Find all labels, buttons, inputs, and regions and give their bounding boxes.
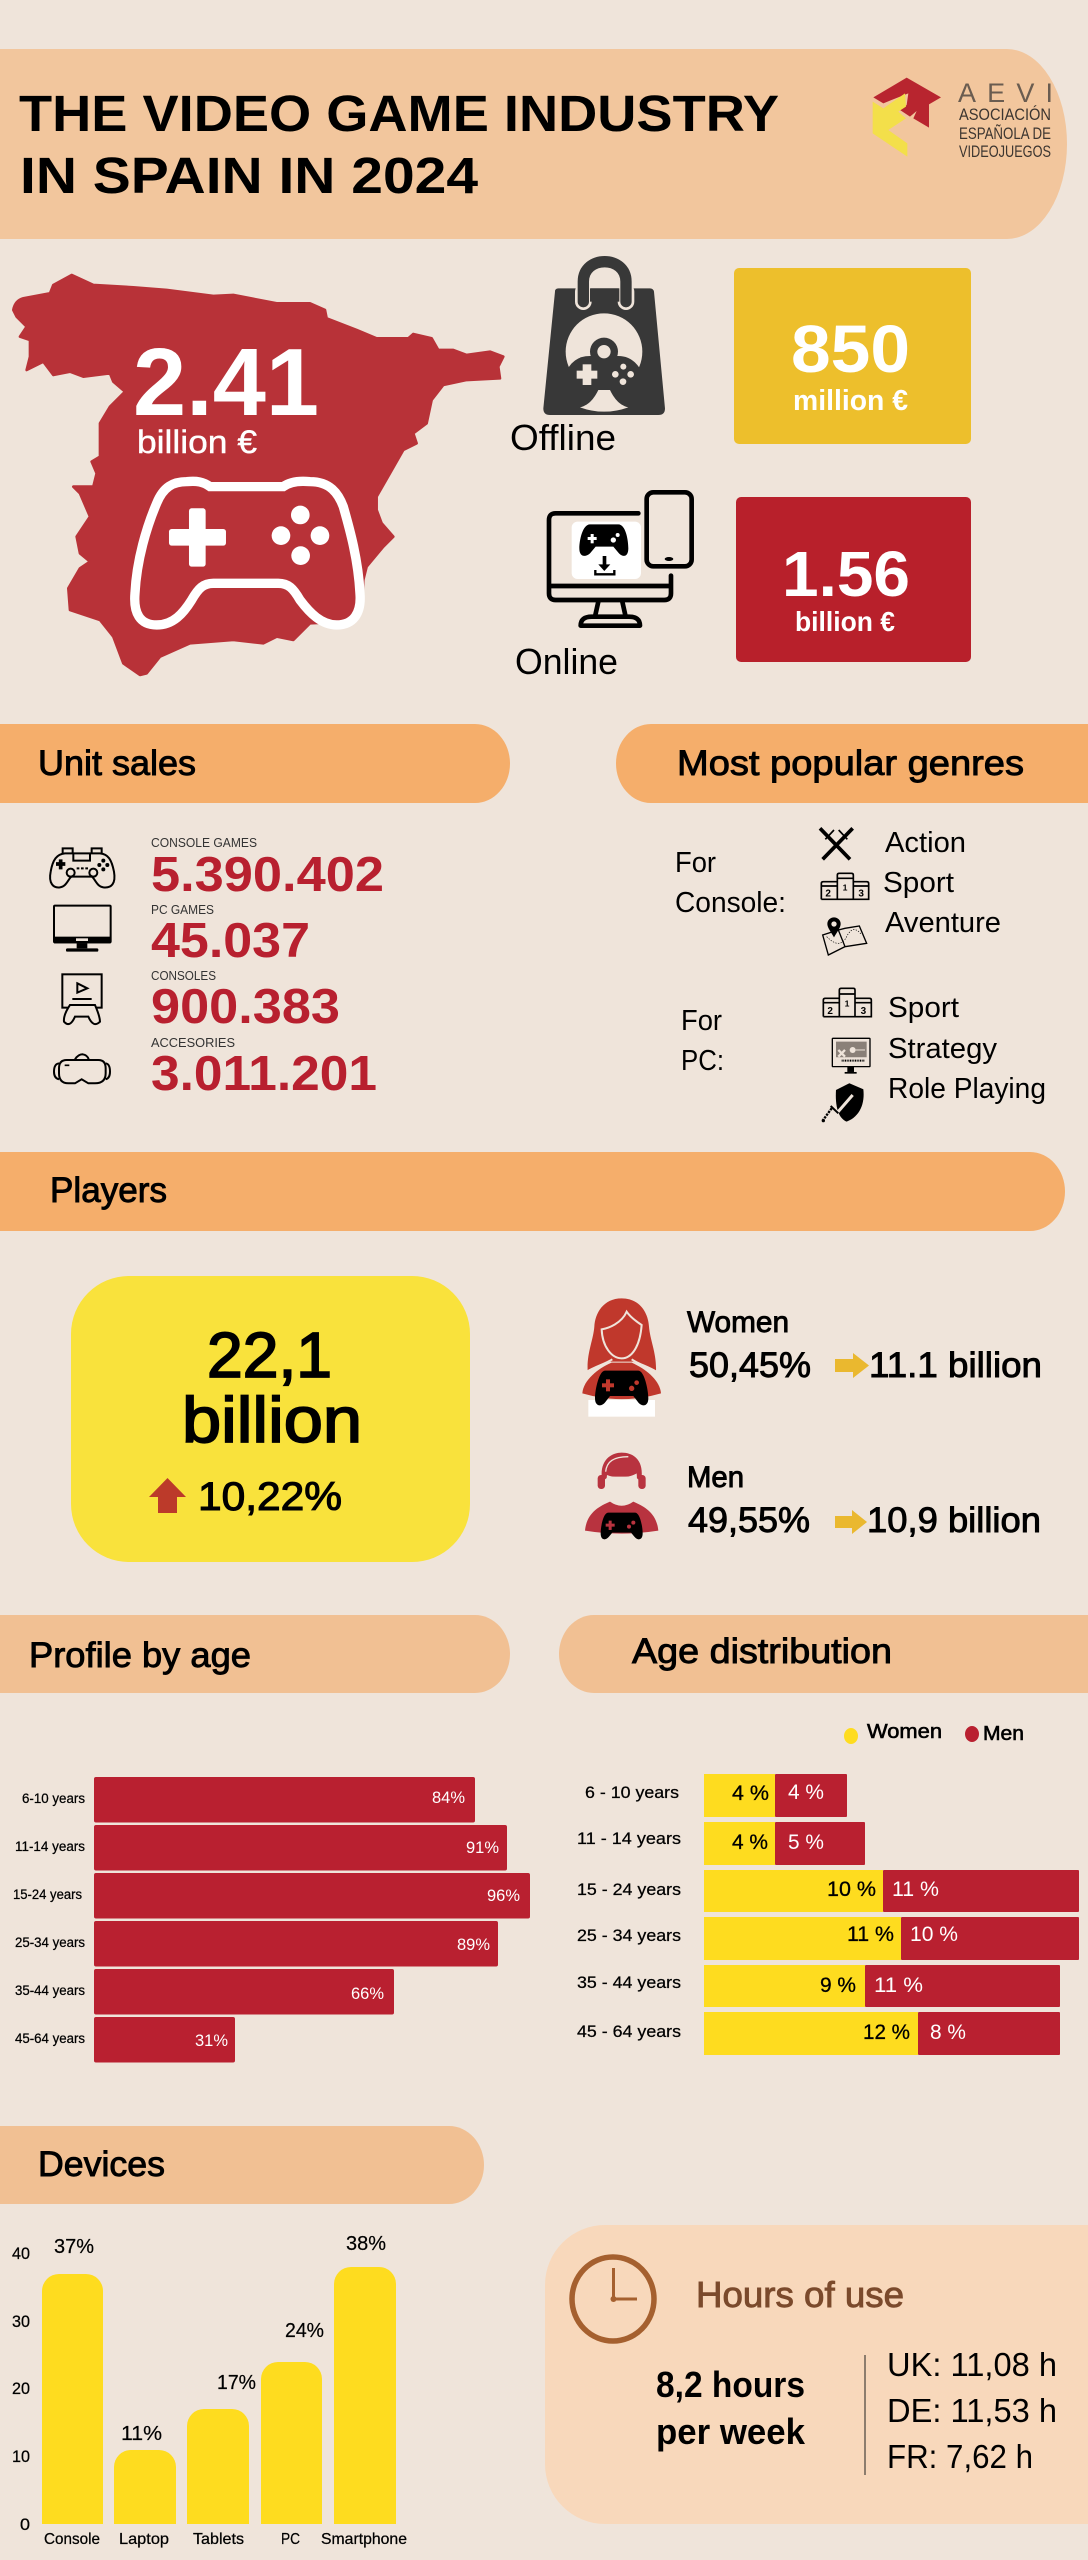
logo: AEVI xyxy=(873,78,1053,161)
icon: game controller xyxy=(135,481,360,625)
stat: women: 11.1 billion xyxy=(869,1346,1042,1385)
stat: women: 50,45% xyxy=(689,1346,811,1385)
icon: VR headset xyxy=(54,1054,110,1083)
icon: offline shopping bag xyxy=(543,262,665,415)
bar chart: profile by age: 35-44 years xyxy=(15,1983,85,1998)
heading: unit sales xyxy=(0,724,510,803)
stacked bar chart: age distribution: 11 % xyxy=(847,1923,894,1946)
bar chart: devices xyxy=(12,2233,407,2548)
stat: consoles: 900.383 xyxy=(151,980,340,1034)
icon: clock xyxy=(572,2257,654,2341)
genre: sport: Sport xyxy=(883,867,954,899)
bar chart: profile by age: 15-24 years xyxy=(13,1887,82,1902)
icon: console games controller xyxy=(50,848,114,887)
heading: age distribution: Age distribution xyxy=(632,1632,892,1671)
stat: PC games: 45.037 xyxy=(151,914,310,968)
total figure: 2.41 xyxy=(133,329,319,436)
heading: age distribution xyxy=(559,1615,1088,1693)
title xyxy=(19,85,779,204)
icon: podium: 1 xyxy=(845,999,850,1009)
icon: crossed swords xyxy=(820,828,853,859)
stacked bar chart: age distribution: 11 % xyxy=(892,1878,939,1901)
bar chart: profile by age: 11-14 years xyxy=(15,1839,85,1854)
bar chart: profile by age: 45-64 years xyxy=(15,2031,85,2046)
heading: unit sales: Unit sales xyxy=(38,744,196,783)
stat: accessories: ACCESORIES xyxy=(151,1035,235,1050)
header banner xyxy=(0,49,1067,239)
bar chart: devices: 11% xyxy=(121,2423,162,2445)
icon: man with controller xyxy=(585,1453,658,1539)
stat: hours per week: 8,2 hours xyxy=(656,2364,805,2405)
panel: total players: billion xyxy=(182,1384,362,1456)
heading: hours of use: Hours of use xyxy=(696,2274,904,2315)
logo: AEVI: AEVI xyxy=(958,78,1053,108)
heading: devices xyxy=(0,2126,484,2204)
bar chart: profile by age xyxy=(13,1777,530,2062)
stacked bar chart: age distribution: 15 - 24 years xyxy=(577,1880,681,1899)
stacked bar chart: age distribution: 12 % xyxy=(863,2021,910,2044)
label: online: Online xyxy=(515,641,618,682)
stacked bar chart: age distribution: 8 % xyxy=(930,2021,966,2044)
panel: hours of use xyxy=(545,2225,1088,2524)
icon: podium: 3 xyxy=(858,889,864,900)
logo: AEVI: ASOCIACIÓN xyxy=(959,105,1051,124)
heading: profile by age xyxy=(0,1615,510,1693)
bar chart: profile by age: 96% xyxy=(487,1886,520,1905)
bar chart: devices: 17% xyxy=(217,2372,256,2394)
map shape xyxy=(13,275,503,675)
stat: women xyxy=(687,1306,1042,1385)
bar chart: devices: Smartphone xyxy=(321,2531,407,2548)
bar chart: devices: Laptop xyxy=(119,2531,169,2548)
icon: podium: 3 xyxy=(861,1006,867,1017)
panel: total players: 10,22% xyxy=(198,1475,342,1519)
bar chart: profile by age: 6-10 years xyxy=(22,1791,85,1806)
genres for PC xyxy=(681,988,1046,1122)
icon: podium xyxy=(823,988,871,1017)
stat: console games: CONSOLE GAMES xyxy=(151,835,257,850)
icon: podium xyxy=(821,873,869,900)
unit sales list xyxy=(50,835,384,1101)
icon: podium: 1 xyxy=(843,883,848,893)
icon: podium: 2 xyxy=(827,1006,833,1017)
stat: men: 10,9 billion xyxy=(867,1501,1041,1540)
y axis labels: 40 xyxy=(12,2244,30,2263)
bar chart: devices: PC xyxy=(281,2531,300,2548)
legend: women and men xyxy=(844,1721,1024,1745)
stacked bar chart: age distribution: 11 % xyxy=(874,1974,923,1997)
panel: offline revenue: million € xyxy=(793,385,908,417)
heading: players xyxy=(0,1152,1065,1231)
label: offline: Offline xyxy=(510,417,616,458)
bar chart: devices: Tablets xyxy=(193,2531,244,2548)
stat: accessories: 3.011.201 xyxy=(151,1047,377,1101)
heading: players: Players xyxy=(50,1171,167,1210)
genres for console xyxy=(675,827,1001,955)
title: THE VIDEO GAME INDUSTRY xyxy=(19,85,779,142)
icon: strategy monitor xyxy=(832,1038,870,1074)
y axis labels xyxy=(12,2244,30,2534)
genre: aventure: Aventure xyxy=(885,907,1001,939)
stacked bar chart: age distribution: 35 - 44 years xyxy=(577,1973,681,1992)
stacked bar chart: age distribution: 4 % xyxy=(732,1831,768,1854)
label: for PC xyxy=(681,1005,724,1077)
bar chart: profile by age: 89% xyxy=(457,1935,490,1954)
stacked bar chart: age distribution xyxy=(577,1774,1079,2055)
logo: AEVI: VIDEOJUEGOS xyxy=(959,142,1051,161)
stat: hours per week xyxy=(656,2364,806,2452)
icon: podium: 2 xyxy=(825,889,831,900)
heading: most popular genres xyxy=(616,724,1088,803)
genre: strategy: Strategy xyxy=(888,1033,998,1065)
y axis labels: 0 xyxy=(20,2515,30,2534)
panel: offline revenue: 850 xyxy=(791,312,910,387)
stat: hours per week: per week xyxy=(656,2411,806,2452)
comparison by country: DE: 11,53 h xyxy=(887,2392,1057,2429)
panel: offline revenue xyxy=(734,268,971,444)
heading: most popular genres: Most popular genres xyxy=(677,744,1024,783)
bar chart: profile by age: 25-34 years xyxy=(15,1935,85,1950)
bar chart: devices: 38% xyxy=(346,2233,386,2255)
genre: role playing: Role Playing xyxy=(888,1073,1046,1105)
logo: AEVI: ESPAÑOLA DE xyxy=(959,124,1051,143)
arrow xyxy=(835,1510,867,1534)
comparison by country xyxy=(887,2346,1057,2475)
bar chart: profile by age: 84% xyxy=(432,1788,465,1807)
icon: online devices xyxy=(549,492,692,626)
panel: online revenue xyxy=(736,497,971,662)
panel: total players: 22,1 xyxy=(207,1319,332,1391)
stacked bar chart: age distribution: 11 - 14 years xyxy=(577,1829,681,1848)
title: IN SPAIN IN 2024 xyxy=(20,147,479,204)
bar chart: devices: Console xyxy=(44,2531,100,2548)
stacked bar chart: age distribution: 6 - 10 years xyxy=(585,1783,679,1802)
stacked bar chart: age distribution: 5 % xyxy=(788,1831,824,1854)
icon: woman with controller xyxy=(582,1298,661,1417)
bar chart: profile by age: 31% xyxy=(195,2031,228,2050)
stat: men: 49,55% xyxy=(688,1501,810,1540)
label: for console: Console: xyxy=(675,887,786,919)
y axis labels: 20 xyxy=(12,2379,30,2398)
panel: total players xyxy=(71,1276,470,1562)
bar chart: devices: 24% xyxy=(285,2320,324,2342)
bar chart: devices: 37% xyxy=(54,2236,94,2258)
stat: console games: 5.390.402 xyxy=(151,848,384,902)
stat: PC games: PC GAMES xyxy=(151,902,214,917)
panel: online revenue: 1.56 xyxy=(782,538,910,610)
icon: console xyxy=(62,974,102,1024)
label: for console: For xyxy=(675,847,716,879)
icon: shield and sword xyxy=(822,1083,864,1122)
total figure: billion € xyxy=(137,424,257,460)
stacked bar chart: age distribution: 4 % xyxy=(788,1781,824,1804)
arrow xyxy=(835,1353,869,1378)
stacked bar chart: age distribution: 9 % xyxy=(820,1974,856,1997)
heading: profile by age: Profile by age xyxy=(29,1636,251,1675)
stat: consoles: CONSOLES xyxy=(151,968,216,983)
stacked bar chart: age distribution: 25 - 34 years xyxy=(577,1926,681,1945)
label: for PC: PC: xyxy=(681,1045,724,1077)
panel: online revenue: billion € xyxy=(795,606,895,637)
stacked bar chart: age distribution: 45 - 64 years xyxy=(577,2022,681,2041)
label: for console xyxy=(675,847,786,919)
comparison by country: UK: 11,08 h xyxy=(887,2346,1057,2383)
heading: devices: Devices xyxy=(38,2145,165,2184)
icon: up arrow xyxy=(149,1478,186,1513)
stat: women: Women xyxy=(687,1306,789,1339)
genre: action: Action xyxy=(885,827,966,859)
bar chart: profile by age: 66% xyxy=(351,1984,384,2003)
stacked bar chart: age distribution: 10 % xyxy=(910,1923,958,1946)
y axis labels: 10 xyxy=(12,2447,30,2466)
map of Spain with total revenue xyxy=(13,275,503,675)
legend: women and men: Women xyxy=(867,1721,942,1743)
bar chart: profile by age: 91% xyxy=(466,1838,499,1857)
icon: map with pin xyxy=(823,917,867,955)
y axis labels: 30 xyxy=(12,2312,30,2331)
stat: men: Men xyxy=(687,1461,744,1494)
stacked bar chart: age distribution: 10 % xyxy=(827,1878,876,1901)
stat: men xyxy=(687,1461,1041,1540)
comparison by country: FR: 7,62 h xyxy=(887,2438,1033,2475)
legend: women and men: Men xyxy=(983,1723,1024,1745)
icon: PC monitor xyxy=(54,906,111,952)
stacked bar chart: age distribution: 4 % xyxy=(732,1782,769,1805)
genre: sport: Sport xyxy=(888,992,959,1024)
label: for PC: For xyxy=(681,1005,722,1037)
